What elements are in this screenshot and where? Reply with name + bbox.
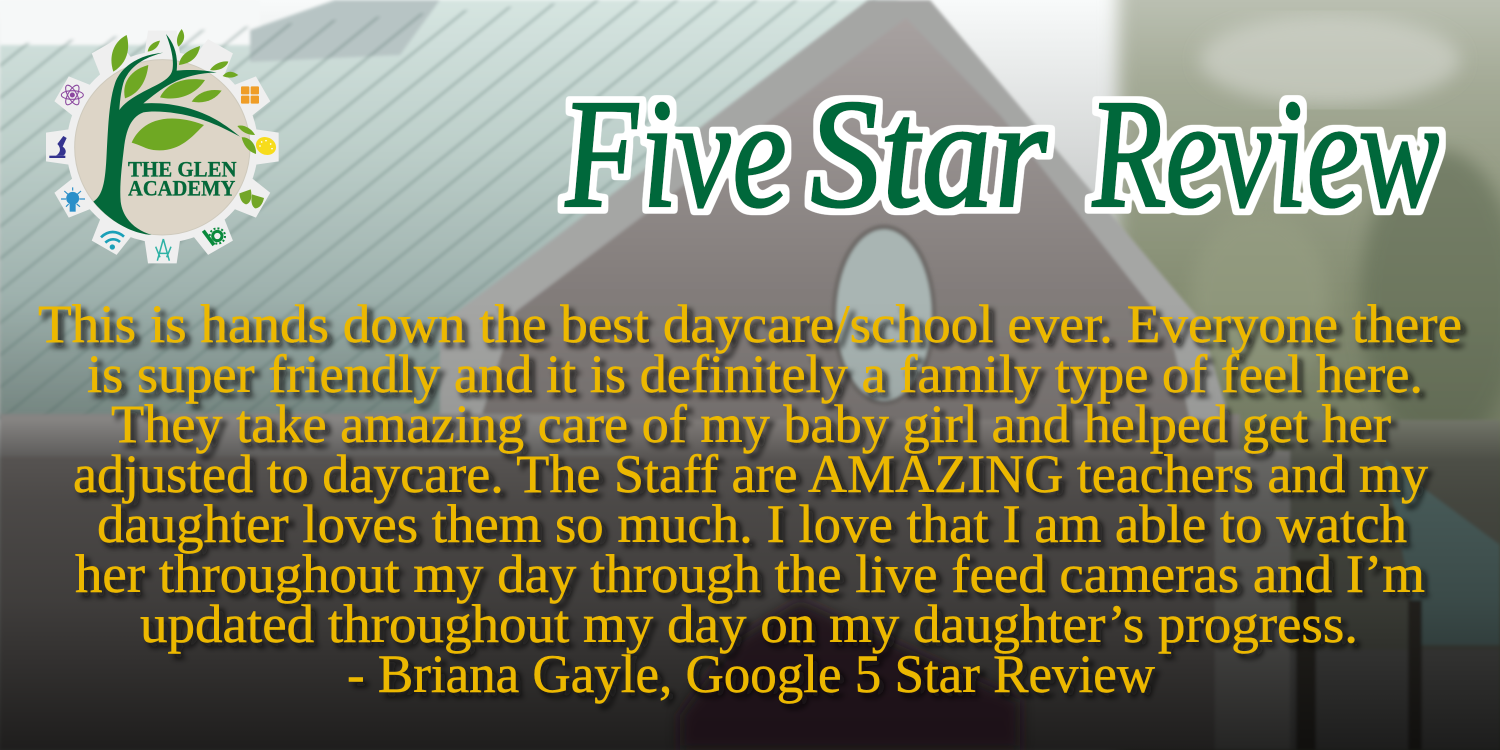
- icon: wifi: [101, 232, 124, 248]
- logo: The Glen Academy: [46, 29, 279, 263]
- review quote text: They take amazing care of my baby girl and helped get her: [111, 394, 1391, 454]
- review quote text: her throughout my day through the live feed cameras and I’m: [75, 544, 1425, 604]
- review quote text: [38, 294, 1462, 704]
- tree: [93, 34, 240, 235]
- icon: light bulb: [61, 187, 85, 212]
- icon: wrench and gear: [203, 228, 225, 245]
- review quote text: daughter loves them so much. I love that I am able to watch: [97, 494, 1407, 554]
- leaves: [111, 29, 256, 154]
- beige disc: [75, 60, 250, 235]
- gear ring: [46, 31, 279, 263]
- review quote text: This is hands down the best daycare/school ever. Everyone there: [38, 294, 1462, 354]
- arched window: [834, 227, 934, 403]
- title: Five Star Review: Star: [804, 67, 1054, 240]
- logo wordmark: THE GLEN: [128, 157, 237, 182]
- title: Five Star Review: [558, 67, 1445, 240]
- doorway awning: [680, 600, 1020, 750]
- review quote text: updated throughout my day on my daughter’s progress.: [140, 594, 1358, 654]
- review quote text: adjusted to daycare. The Staff are AMAZING teachers and my: [73, 444, 1428, 504]
- review quote text: is super friendly and it is definitely a family type of feel here.: [87, 344, 1423, 404]
- logo wordmark: [128, 157, 237, 201]
- icon: atom: [61, 83, 83, 107]
- icon: palette: [253, 134, 279, 158]
- title: Five Star Review: Five: [558, 67, 792, 240]
- icon: theatre masks: [239, 189, 264, 208]
- trees on the right: [1118, 0, 1500, 750]
- review quote text: - Briana Gayle, Google 5 Star Review: [347, 644, 1155, 704]
- icon: microscope: [49, 136, 67, 158]
- icon: calculator: [241, 86, 259, 104]
- logo wordmark: ACADEMY: [128, 176, 235, 201]
- icon: compass: [156, 239, 171, 261]
- roof: teal metal roof: [0, 0, 900, 420]
